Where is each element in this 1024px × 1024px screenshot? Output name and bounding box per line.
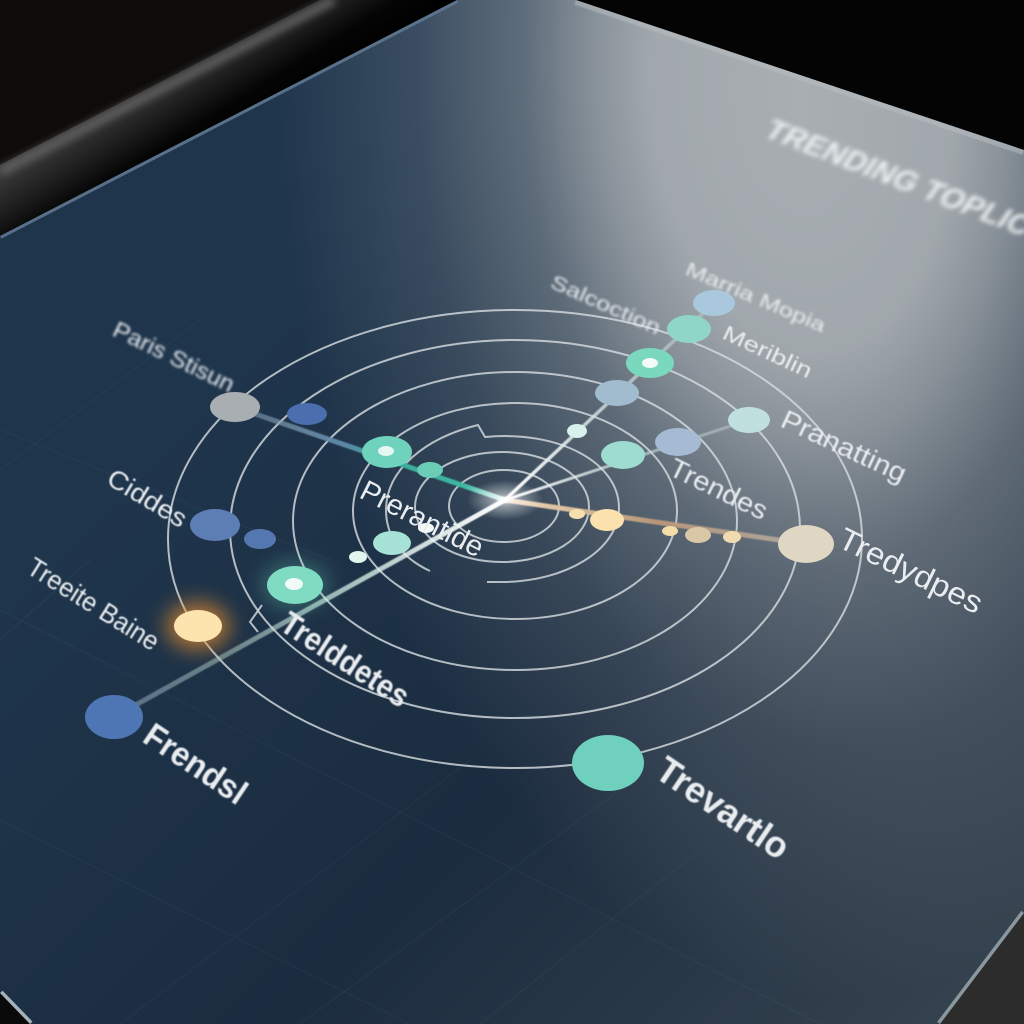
label: Trendes: Trendes	[664, 452, 773, 526]
label: Meriblin: Meriblin	[719, 322, 816, 383]
connector beams	[114, 303, 806, 717]
label: Paris Stisun: Paris Stisun	[109, 316, 239, 397]
label: Treeite Baine: Treeite Baine	[22, 552, 165, 657]
label: Ciddes: Ciddes	[102, 462, 193, 533]
label: Frendsl: Frendsl	[137, 716, 254, 812]
perspective grid	[20, 443, 614, 992]
label: Prerantide: Prerantide	[355, 475, 489, 564]
label: Marria Mopia: Marria Mopia	[682, 259, 829, 337]
radar rings chart	[168, 310, 862, 768]
labels	[22, 259, 988, 868]
label: Tredydpes: Tredydpes	[833, 521, 988, 621]
label: Pranatting: Pranatting	[776, 404, 911, 488]
label: Trevartlo: Trevartlo	[649, 749, 797, 868]
label: Trelddetes: Trelddetes	[274, 605, 416, 714]
center glow	[467, 480, 543, 520]
label: Salcoction: Salcoction	[547, 271, 664, 340]
panel rim	[0, 0, 457, 236]
nodes	[85, 290, 834, 791]
